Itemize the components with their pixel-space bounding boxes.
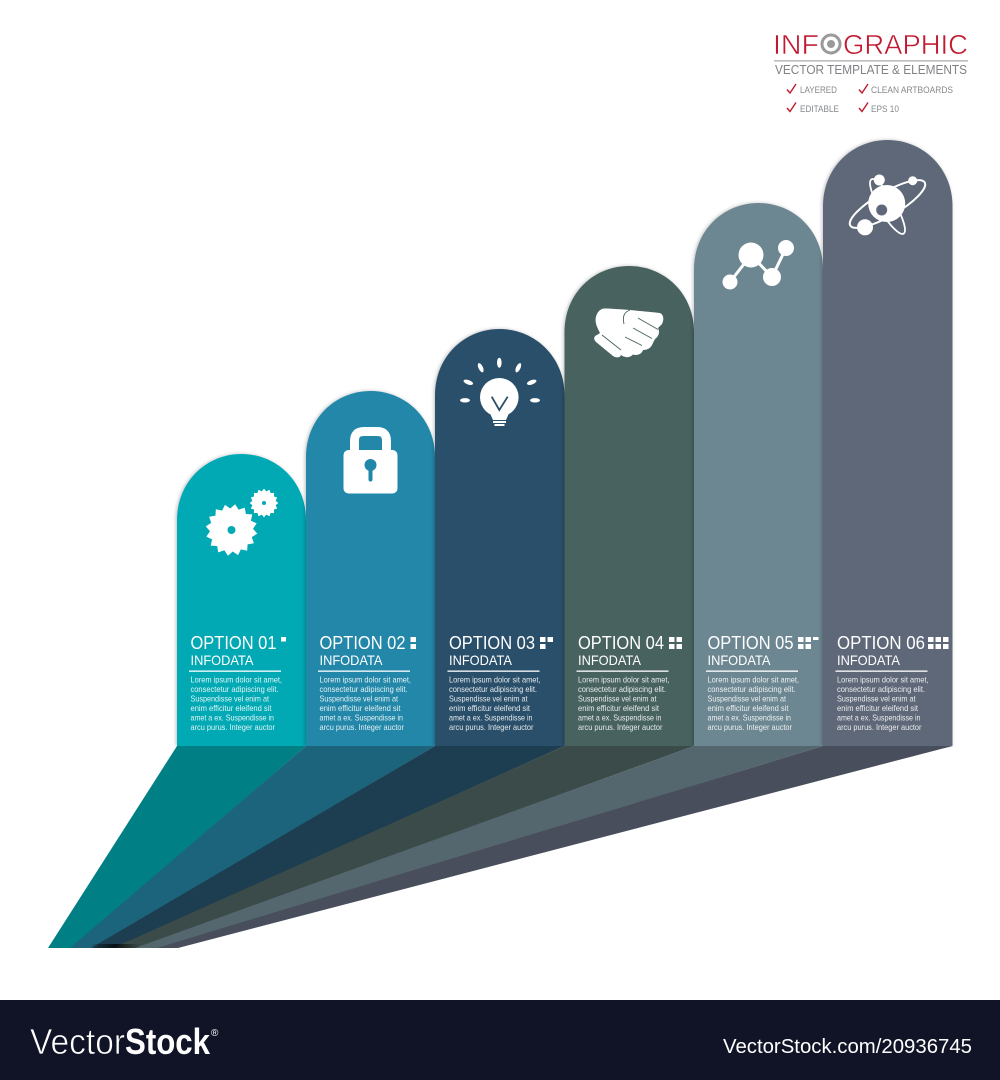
column 06 <box>823 140 952 746</box>
panel: option 04 <box>564 266 694 746</box>
logo: infographic header <box>773 29 968 114</box>
option 06 text: consectetur adipiscing elit. <box>837 685 925 694</box>
option 02 text: Lorem ipsum dolor sit amet, <box>320 676 411 684</box>
option 03 text: Lorem ipsum dolor sit amet, <box>449 676 540 684</box>
option 03 squares <box>540 637 553 649</box>
option 05 text: INFODATA <box>708 652 771 668</box>
converging perspective base <box>48 746 952 948</box>
option 04 text: consectetur adipiscing elit. <box>578 685 666 694</box>
column 01 <box>177 454 306 746</box>
column 02 <box>306 391 435 746</box>
option 06 text: OPTION 06 <box>837 633 925 653</box>
option 01 text: consectetur adipiscing elit. <box>190 685 278 694</box>
panel: option 06 <box>823 140 952 746</box>
option 05 text: arcu purus. Integer auctor <box>708 723 792 732</box>
feature checklist: CLEAN ARTBOARDS <box>871 85 953 95</box>
logo title <box>773 29 968 60</box>
column 04 <box>564 266 694 746</box>
option 04 text: INFODATA <box>578 652 642 668</box>
option 06 text: arcu purus. Integer auctor <box>837 723 922 732</box>
logo title: INF <box>773 29 819 60</box>
option 02 text: amet a ex. Suspendisse in <box>320 714 403 722</box>
icon: gears <box>202 489 278 559</box>
base tip shading <box>90 944 140 948</box>
option 02 squares <box>410 637 416 649</box>
option 06 text: Lorem ipsum dolor sit amet, <box>837 676 928 684</box>
option 01 text: enim efficitur eleifend sit <box>190 704 272 713</box>
icon: atom <box>844 172 931 238</box>
base strip 01 <box>48 746 306 948</box>
option 05 text: amet a ex. Suspendisse in <box>708 714 791 722</box>
option 06 text: amet a ex. Suspendisse in <box>837 714 921 722</box>
option 04 text: OPTION 04 <box>578 633 664 653</box>
icon: light bulb <box>460 358 540 425</box>
option 05 text <box>706 633 799 732</box>
column 05 <box>694 203 823 746</box>
footer logo: Stock <box>125 1021 211 1062</box>
option 01 text: INFODATA <box>190 652 254 668</box>
option 05 squares <box>798 637 818 649</box>
footer image id: VectorStock.com/20936745 <box>723 1036 972 1058</box>
icon: target letter O <box>822 35 840 53</box>
option 03 text: consectetur adipiscing elit. <box>449 685 537 694</box>
option 03 text: OPTION 03 <box>449 633 535 653</box>
option 02 text: OPTION 02 <box>320 633 406 653</box>
option 02 text: consectetur adipiscing elit. <box>320 685 408 694</box>
option 04 text: Suspendisse vel enim at <box>578 694 657 704</box>
option 01 text: arcu purus. Integer auctor <box>190 723 275 732</box>
base strip 02 <box>70 746 435 948</box>
logo subtitle: VECTOR TEMPLATE & ELEMENTS <box>775 63 967 77</box>
option 04 squares <box>669 637 682 649</box>
option 05 text: Suspendisse vel enim at <box>708 694 787 704</box>
footer bar <box>0 1000 1000 1080</box>
option 03 text: amet a ex. Suspendisse in <box>449 714 533 722</box>
option 04 text: enim efficitur eleifend sit <box>578 704 660 713</box>
base strip 05 <box>135 746 823 948</box>
option 02 text: Suspendisse vel enim at <box>320 694 399 704</box>
footer logo: Vector <box>30 1021 125 1062</box>
option 01 text: OPTION 01 <box>190 633 276 653</box>
feature checklist <box>787 84 953 114</box>
icon: padlock <box>344 432 398 494</box>
option 06 text: enim efficitur eleifend sit <box>837 704 919 713</box>
option 06 text: INFODATA <box>837 652 901 668</box>
logo title: GRAPHIC <box>843 29 968 60</box>
option 05 text: consectetur adipiscing elit. <box>708 685 796 694</box>
footer logo <box>30 1021 219 1062</box>
icon: handshake <box>594 308 663 357</box>
footer logo: ® <box>211 1028 219 1039</box>
option 04 text: Lorem ipsum dolor sit amet, <box>578 676 670 684</box>
option 03 text: Suspendisse vel enim at <box>449 694 528 704</box>
panel: option 02 <box>306 391 435 746</box>
feature checklist: LAYERED <box>800 85 837 95</box>
option 01 squares <box>281 637 286 642</box>
option 03 text: enim efficitur eleifend sit <box>449 704 531 713</box>
option 06 text: Suspendisse vel enim at <box>837 694 916 704</box>
feature checklist: EPS 10 <box>871 104 899 114</box>
panel: option 01 <box>177 454 306 746</box>
option 05 text: OPTION 05 <box>708 633 794 653</box>
column 03 <box>435 329 564 746</box>
option 02 text: enim efficitur eleifend sit <box>320 704 401 713</box>
option 06 squares <box>928 637 948 649</box>
option 02 text: INFODATA <box>320 652 383 668</box>
base strip 06 <box>157 746 952 948</box>
base strip 04 <box>113 746 694 948</box>
option 03 text: arcu purus. Integer auctor <box>449 723 534 732</box>
option 03 text: INFODATA <box>449 652 513 668</box>
option 02 text <box>318 633 411 732</box>
option 01 text: Lorem ipsum dolor sit amet, <box>190 676 282 684</box>
base strip 03 <box>91 746 564 948</box>
option 01 text: Suspendisse vel enim at <box>190 694 270 704</box>
option 01 text: amet a ex. Suspendisse in <box>190 714 274 722</box>
option 04 text: amet a ex. Suspendisse in <box>578 714 662 722</box>
option 05 text: Lorem ipsum dolor sit amet, <box>708 676 799 684</box>
feature checklist: EDITABLE <box>800 104 839 114</box>
option 02 text: arcu purus. Integer auctor <box>320 723 404 732</box>
option 04 text <box>576 633 670 732</box>
option 06 text <box>836 633 928 732</box>
panel: option 05 <box>694 203 823 746</box>
panel: option 03 <box>435 329 564 746</box>
option 05 text: enim efficitur eleifend sit <box>708 704 789 713</box>
option 03 text <box>448 633 540 732</box>
option 01 text <box>189 633 282 732</box>
icon: molecule nodes <box>722 240 794 290</box>
option 04 text: arcu purus. Integer auctor <box>578 723 663 732</box>
